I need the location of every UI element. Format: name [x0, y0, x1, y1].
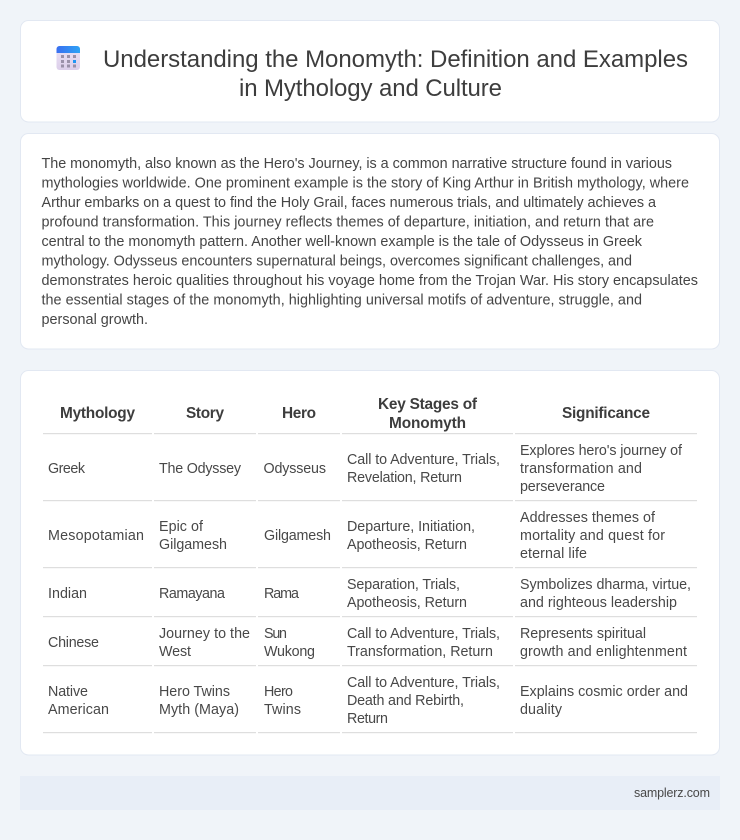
table row: Chinese: West [159, 644, 191, 660]
text block: monomyth description: mythologies worldwide. One prominent example is the story of King Arthur in British mythology, where [42, 176, 689, 192]
table row: Greek: Greek [48, 461, 86, 477]
table row: Mesopotamian: Epic of [159, 519, 203, 535]
panel: intro paragraph [20, 134, 720, 349]
table row: Mesopotamian: Departure, Initiation, [347, 519, 475, 535]
table row: Chinese: Chinese [48, 635, 99, 651]
title: Understanding the Monomyth: Definition and Examples [103, 46, 688, 73]
table row: Mesopotamian: Gilgamesh [264, 528, 331, 544]
table row: Native American: Hero Twins [159, 684, 230, 700]
table row: Native American: Hero [264, 684, 293, 700]
table row: Native American: duality [520, 702, 563, 718]
footer bar [20, 776, 720, 810]
table row: Native American: Return [347, 711, 388, 727]
table header row: Key Stages of [378, 396, 478, 413]
table row: Chinese: Journey to the [159, 626, 250, 642]
text block: monomyth description: profound transformation. This journey reflects themes of departure, initiation, and return that are [42, 214, 654, 230]
table row: Indian: Ramayana [159, 586, 225, 602]
table row: Greek: Explores hero's journey of [520, 443, 682, 459]
table row: Mesopotamian: Gilgamesh [159, 537, 227, 553]
table row: Chinese: Sun [264, 626, 287, 642]
table row: Greek: transformation and [520, 461, 642, 477]
table row: Native American: Myth (Maya) [159, 702, 239, 718]
table row: Mesopotamian: mortality and quest for [520, 528, 665, 544]
table header row: Monomyth [389, 415, 466, 432]
table row: Native American: American [48, 702, 109, 718]
footer credit: samplerz.com [634, 786, 710, 800]
table row: Chinese: Transformation, Return [347, 644, 493, 660]
panel: mythology table [20, 370, 720, 755]
text block: monomyth description: the essential stages of the monomyth, highlighting universal motifs of adventure, struggle, and [42, 292, 642, 308]
text block: monomyth description: personal growth. [42, 312, 148, 328]
table row: Indian: Rama [264, 586, 299, 602]
icon: calendar [56, 46, 80, 70]
title [103, 46, 688, 102]
table header row: Hero [282, 405, 316, 422]
table row: Native American: Call to Adventure, Trials, [347, 675, 500, 691]
table row: Chinese: Call to Adventure, Trials, [347, 626, 500, 642]
table row: Chinese: Represents spiritual [520, 626, 646, 642]
table row: Native American: Native [48, 684, 88, 700]
table row: Indian: Separation, Trials, [347, 577, 460, 593]
table row: Greek: The Odyssey [159, 461, 242, 477]
table row: Native American [48, 675, 688, 727]
table row: Indian [48, 577, 691, 611]
table row: Native American: Explains cosmic order and [520, 684, 688, 700]
table header row: Mythology [60, 405, 135, 422]
table row: Greek: Revelation, Return [347, 470, 462, 486]
table row: Mesopotamian: eternal life [520, 546, 587, 562]
table header row: Significance [562, 405, 650, 422]
table row: Greek: Call to Adventure, Trials, [347, 452, 500, 468]
text block: monomyth description: mythology. Odysseus encounters supernatural beings, overcomes significant challenges, and [42, 254, 632, 270]
title: in Mythology and Culture [239, 75, 502, 102]
table row: Mesopotamian: Apotheosis, Return [347, 537, 467, 553]
table row: Mesopotamian: Mesopotamian [48, 528, 144, 544]
text block: monomyth description: demonstrates heroic qualities throughout his voyage home from the Trojan War. His story encapsulates [42, 273, 698, 289]
table row: Indian: and righteous leadership [520, 595, 677, 611]
table row: Native American: Death and Rebirth, [347, 693, 464, 709]
panel: header [20, 20, 720, 122]
text block: monomyth description [42, 156, 698, 328]
table row: Greek: perseverance [520, 479, 605, 495]
table row: Native American: Twins [264, 702, 301, 718]
table row: Chinese [48, 626, 687, 660]
table row: Greek: Odysseus [264, 461, 326, 477]
text block: monomyth description: central to the monomyth pattern. Another well-known example is the tale of Odysseus in Greek [42, 234, 643, 250]
table row: Indian: Apotheosis, Return [347, 595, 467, 611]
table row: Chinese: Wukong [264, 644, 315, 660]
table header row: Story [186, 405, 224, 422]
table row: Greek [48, 443, 682, 495]
table row: Chinese: growth and enlightenment [520, 644, 687, 660]
table header row [60, 396, 650, 432]
text block: monomyth description: The monomyth, also known as the Hero's Journey, is a common narrative structure found in various [42, 156, 672, 172]
table row: Indian: Symbolizes dharma, virtue, [520, 577, 691, 593]
table row: Mesopotamian [48, 510, 665, 562]
table row: Mesopotamian: Addresses themes of [520, 510, 655, 526]
table row: Indian: Indian [48, 586, 87, 602]
text block: monomyth description: Arthur embarks on a quest to find the Holy Grail, faces numerous trials, and ultimately achieves a [42, 195, 656, 211]
